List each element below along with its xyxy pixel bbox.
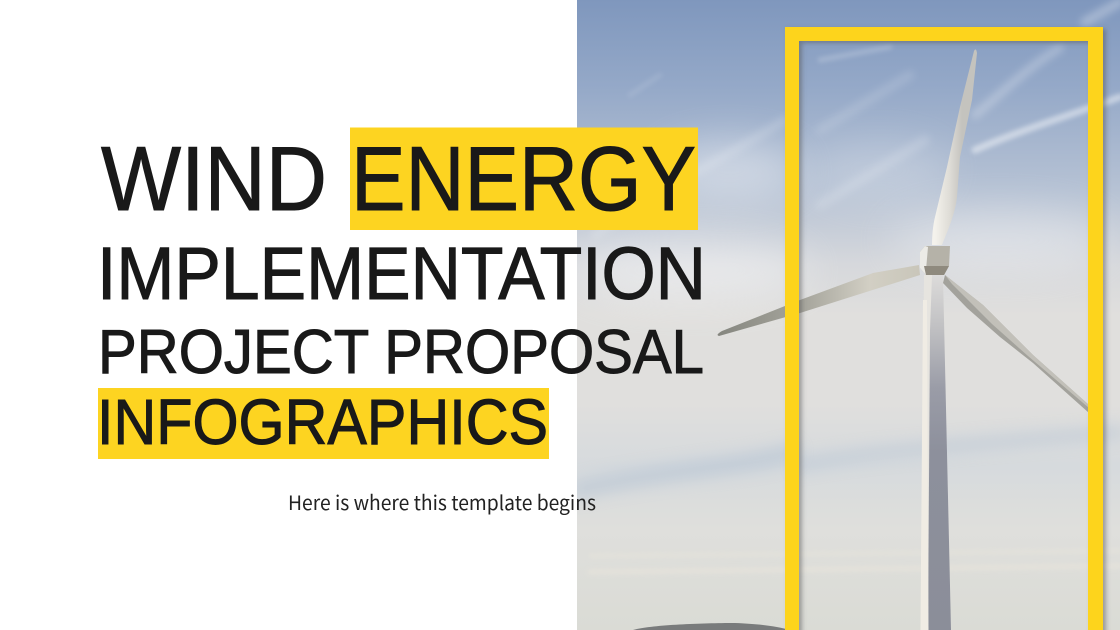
tower lit strip	[920, 300, 928, 630]
highlight: energy	[350, 128, 698, 230]
blade: right light edge	[945, 275, 1089, 408]
title line 4: INFOGRAPHICS	[97, 386, 548, 458]
blade: right	[943, 275, 1089, 413]
title line 3: PROJECT PROPOSAL	[98, 317, 704, 387]
tower shaded side	[928, 275, 951, 630]
highlight: infographics	[98, 388, 549, 459]
sky	[577, 0, 1120, 630]
title line 1: wind: WIND	[101, 129, 327, 230]
nacelle band	[924, 266, 949, 275]
title line 1: energy: ENERGY	[351, 129, 696, 230]
yellow frame	[785, 27, 1103, 630]
nacelle light side	[920, 246, 928, 275]
clouds	[570, 2, 1120, 572]
nacelle	[920, 246, 950, 275]
distant hill	[633, 623, 790, 630]
blade: left	[718, 265, 920, 336]
title	[97, 128, 706, 459]
title line 2: IMPLEMENTATION	[97, 232, 706, 315]
photo: sky with wind turbine	[570, 0, 1120, 630]
subtitle: Here is where this template begins	[288, 487, 596, 516]
blade: up	[932, 49, 977, 245]
tower	[924, 275, 932, 522]
turbine	[718, 49, 1089, 630]
